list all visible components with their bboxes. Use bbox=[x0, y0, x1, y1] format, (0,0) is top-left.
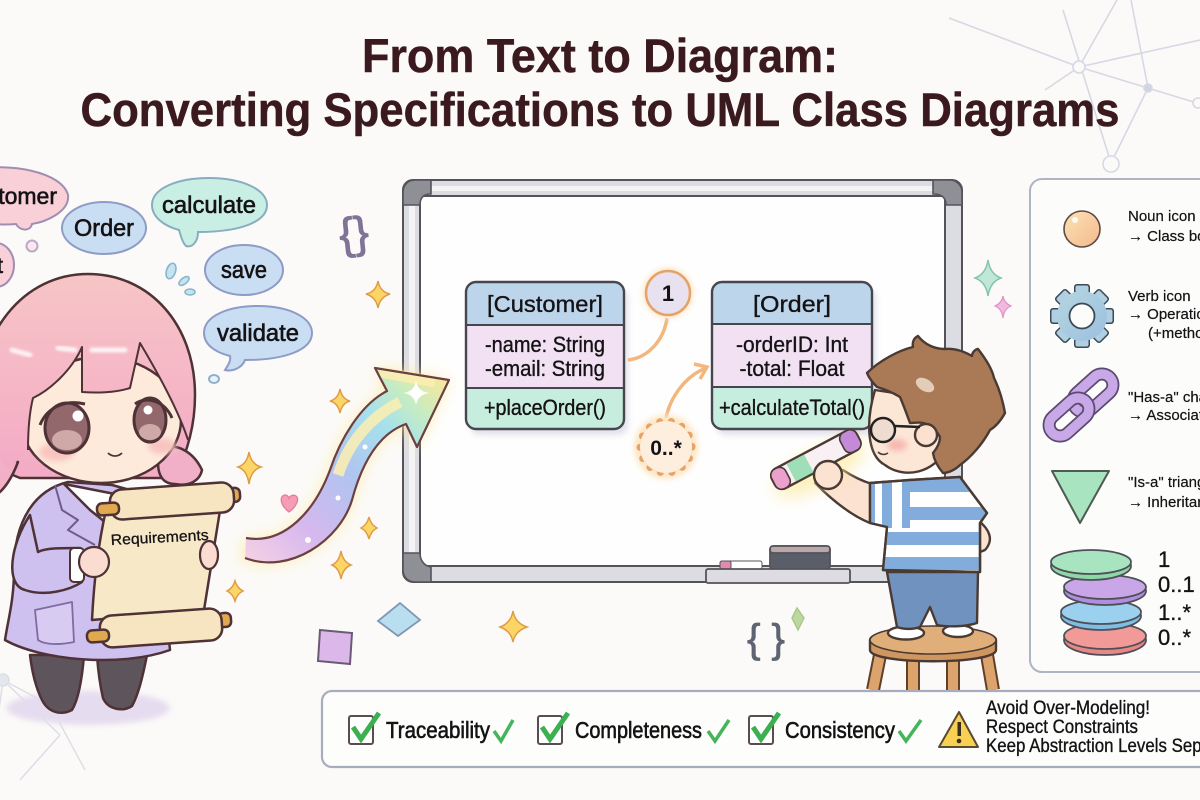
speech bubble: Order: Order bbox=[74, 215, 134, 242]
multiplicity labels: 1..* bbox=[1158, 600, 1191, 625]
whiteboard corners bbox=[403, 180, 962, 582]
hair back bbox=[0, 274, 195, 478]
speech bubble: Order bbox=[62, 202, 146, 254]
speech bubble: calculate: calculate bbox=[162, 192, 256, 219]
requirements label: Requirements bbox=[110, 527, 209, 549]
legend text: verb: Verb icon bbox=[1128, 288, 1191, 305]
multiplicity labels: 1 bbox=[1158, 547, 1170, 572]
warning text: Respect Constraints bbox=[986, 717, 1138, 738]
hair curls bbox=[158, 447, 202, 485]
uml class: Customer bbox=[466, 282, 628, 435]
scroll bottom roll bbox=[87, 608, 231, 648]
braces bottom: { } bbox=[747, 617, 785, 661]
check: Consistency: Consistency bbox=[785, 717, 895, 743]
mouth bbox=[108, 453, 122, 456]
face bbox=[869, 390, 945, 473]
network decoration: top right bbox=[949, 0, 1200, 172]
speech bubble: pink fragment bbox=[0, 243, 14, 287]
uml class: Customer: -name: String bbox=[485, 332, 605, 357]
association line: 1 bbox=[628, 318, 667, 360]
shorts bbox=[887, 572, 978, 629]
multiplicity badge: 0..* bbox=[634, 415, 698, 479]
scroll top roll bbox=[97, 482, 240, 520]
icon: verb gear bbox=[1050, 284, 1114, 348]
checklist panel bbox=[322, 691, 1200, 767]
floor shadow bbox=[6, 691, 170, 725]
collar bbox=[64, 484, 120, 530]
icon: noun sphere bbox=[1064, 211, 1100, 247]
shirt bbox=[870, 477, 990, 572]
glasses bbox=[871, 418, 920, 442]
blush bbox=[39, 443, 75, 461]
socks bbox=[888, 626, 924, 640]
multiplicity badge: 1 bbox=[643, 268, 693, 318]
sleeve bbox=[12, 515, 82, 593]
multiplicity badge: 0..*: 0..* bbox=[650, 437, 683, 460]
character: boy on stool bbox=[766, 336, 1005, 690]
check: Traceability bbox=[349, 713, 513, 744]
sparkles: teal and pink bbox=[792, 260, 1011, 630]
uml class: Customer: [Customer] bbox=[487, 291, 603, 317]
check: Completeness bbox=[538, 713, 729, 744]
hands bbox=[79, 547, 109, 577]
icon: triangle bbox=[1052, 471, 1109, 523]
speech bubble: validate: validate bbox=[217, 320, 299, 347]
speech bubble: save bbox=[205, 245, 283, 295]
title bbox=[80, 29, 1120, 136]
check: Consistency bbox=[749, 713, 921, 744]
blue diamond bbox=[378, 603, 420, 636]
uml class: Customer: +placeOrder() bbox=[484, 395, 606, 420]
speech bubble: save: save bbox=[221, 257, 267, 284]
icon: multiplicity discs bbox=[1051, 550, 1146, 655]
uml class: Order: +calculateTotal() bbox=[719, 395, 865, 420]
arm bbox=[815, 470, 872, 523]
speech bubble: Customer bbox=[0, 167, 68, 252]
character: girl with scroll bbox=[0, 274, 240, 725]
title: From Text to Diagram: bbox=[362, 29, 838, 82]
eyes bbox=[45, 403, 89, 453]
speech bubble: calculate bbox=[152, 178, 267, 246]
hand bbox=[814, 461, 842, 489]
whiteboard bbox=[403, 180, 962, 582]
multiplicity labels: 0..* bbox=[1158, 625, 1191, 650]
face bbox=[21, 357, 181, 483]
tray, eraser and marker bbox=[706, 546, 850, 583]
ear bbox=[915, 424, 937, 446]
smile bbox=[878, 452, 888, 454]
marker bbox=[766, 427, 872, 508]
uml class: Order: [Order] bbox=[753, 291, 831, 317]
heart bbox=[281, 495, 298, 512]
pocket bbox=[35, 602, 74, 644]
hair bbox=[867, 336, 1005, 473]
title: Converting Specifications to UML Class Diagrams bbox=[80, 83, 1120, 136]
scroll sheet bbox=[92, 498, 222, 620]
legend text: noun: Noun icon bbox=[1128, 208, 1196, 225]
icon: warning triangle bbox=[939, 712, 978, 747]
transformation arrow: rainbow bbox=[240, 368, 449, 564]
bangs bbox=[0, 276, 192, 470]
multiplicity labels: 0..1 bbox=[1158, 572, 1195, 597]
speech bubble: validate bbox=[204, 306, 312, 383]
check: Completeness: Completeness bbox=[575, 717, 702, 743]
sparkles bbox=[227, 281, 527, 642]
purple square bbox=[318, 630, 352, 664]
stool bbox=[870, 626, 996, 690]
check: Traceability: Traceability bbox=[386, 717, 490, 743]
uml class: Customer: -email: String bbox=[485, 356, 605, 381]
braces left: {} bbox=[337, 208, 371, 259]
warning text bbox=[986, 698, 1200, 757]
multiplicity badge: 1: 1 bbox=[662, 281, 674, 306]
coat bbox=[5, 482, 170, 660]
legs bbox=[30, 655, 147, 713]
lashes bbox=[40, 400, 172, 425]
association arrow: 0..* bbox=[666, 364, 707, 418]
thought drops bbox=[164, 262, 195, 295]
uml class: Order: -total: Float bbox=[740, 356, 844, 381]
warning text: Avoid Over-Modeling! bbox=[986, 698, 1150, 719]
network decoration: bottom left bbox=[0, 674, 85, 780]
uml class: Order bbox=[712, 282, 876, 435]
uml class: Order: -orderID: Int bbox=[736, 332, 848, 357]
legend panel bbox=[1030, 179, 1200, 672]
icon: chain bbox=[1045, 369, 1117, 441]
